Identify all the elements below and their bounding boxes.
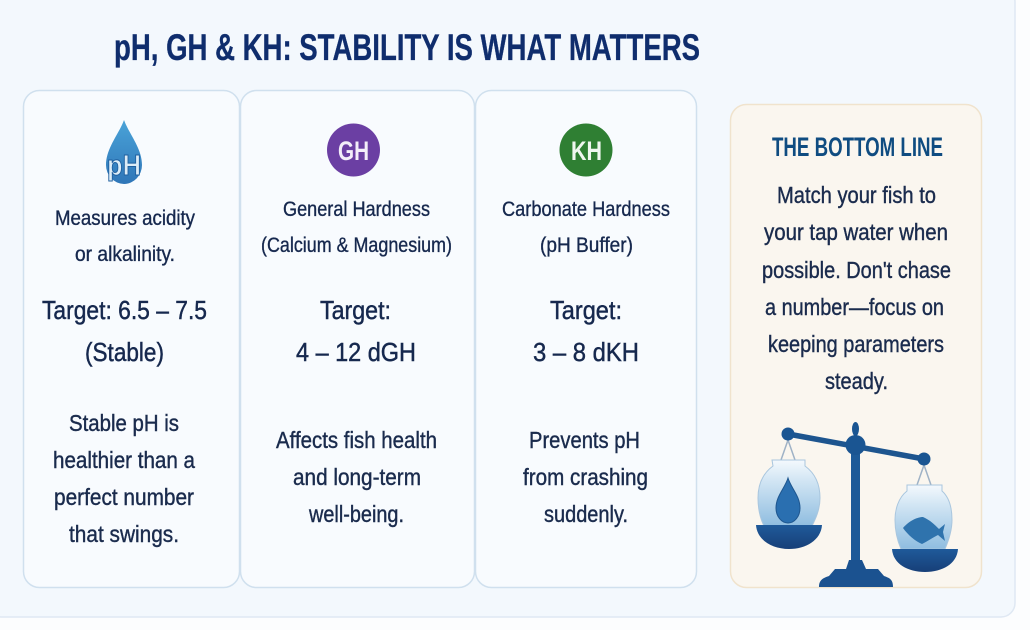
text: advice: your tap water when [764,219,948,245]
right pan [892,549,958,572]
panel: the bottom line [730,104,982,588]
description: KH: (pH Buffer) [540,234,633,257]
description: GH: General Hardness [283,198,430,221]
description: GH: (Calcium & Magnesium) [261,234,452,257]
right hanger [917,465,931,485]
note: KH: suddenly. [544,501,628,527]
target: KH: 3 – 8 dKH [533,337,639,367]
description: GH [261,198,452,257]
left hanger [781,440,795,460]
icon: pH water drop: pH [107,150,141,182]
title: pH, GH & KH: STABILITY IS WHAT MATTERS [114,27,700,68]
note: KH: Prevents pH [529,427,640,453]
text: advice: keeping parameters [768,331,944,357]
target: pH [42,295,207,367]
target: GH: 4 – 12 dGH [296,337,416,367]
left pan [756,525,822,549]
note: GH: well-being. [308,501,404,527]
fish [903,517,945,544]
icon: KH badge [560,124,612,176]
text: advice: a number—focus on [765,294,944,320]
description: pH: Measures acidity [55,207,195,230]
text: advice: Match your fish to [777,182,936,208]
panel: pH [24,90,240,588]
icon: KH badge: KH [571,136,602,166]
text: advice: steady. [825,368,888,394]
description: pH [55,207,195,266]
beam [788,434,924,459]
panel: KH [476,90,696,588]
note: GH: and long-term [293,464,421,490]
icon: GH badge: GH [338,136,369,166]
description: KH [502,198,670,257]
heading: the bottom line: THE BOTTOM LINE [772,132,943,162]
base [819,560,893,587]
description: pH: or alkalinity. [75,243,175,266]
target: GH: Target: [320,295,391,325]
note: pH: perfect number [54,484,194,510]
icon: pH water drop [106,120,142,184]
note: GH [276,427,437,527]
note: pH: that swings. [69,521,179,547]
right jar [895,485,952,549]
note: pH: healthier than a [53,447,195,473]
note: pH [53,410,195,547]
note: GH: Affects fish health [276,427,437,453]
description: KH: Carbonate Hardness [502,198,670,221]
panel: GH [240,90,474,588]
water drop [776,478,800,523]
text: advice [762,182,951,394]
icon: balance scale with water drop and fish [756,422,958,587]
target: GH [296,295,416,367]
target: pH: (Stable) [85,337,164,367]
post [851,446,860,571]
note: pH: Stable pH is [69,410,179,436]
icon: GH badge [327,124,380,176]
left jar [758,460,820,526]
note: KH: from crashing [523,464,648,490]
target: KH [533,295,639,367]
pivot [782,422,930,466]
text: advice: possible. Don't chase [762,257,951,283]
target: KH: Target: [550,295,622,325]
note: KH [523,427,648,527]
target: pH: Target: 6.5 – 7.5 [42,295,207,325]
